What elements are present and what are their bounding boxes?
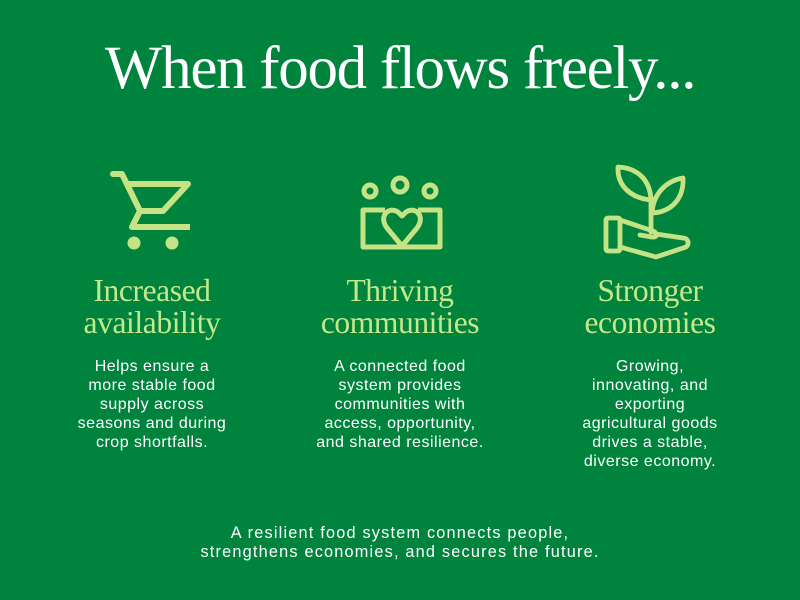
icon: plant in hand xyxy=(604,164,691,260)
text block: drives a stable, xyxy=(592,434,708,451)
heading: availability xyxy=(84,305,220,340)
text block: access, opportunity, xyxy=(324,415,476,432)
heading xyxy=(321,273,479,340)
panel: increased availability xyxy=(78,171,226,451)
text block: Helps ensure a xyxy=(95,358,209,375)
heading xyxy=(84,273,221,340)
icon: shopping cart xyxy=(110,171,191,250)
text block: innovating, and xyxy=(592,377,708,394)
text block: agricultural goods xyxy=(582,415,718,432)
text block: crop shortfalls. xyxy=(96,434,208,451)
text block: communities with xyxy=(335,396,465,413)
text block: exporting xyxy=(615,396,685,413)
panel: thriving communities xyxy=(316,176,484,451)
title: When food flows freely... xyxy=(105,35,695,102)
text block xyxy=(316,358,484,451)
text block: system provides xyxy=(338,377,462,394)
text block: more stable food xyxy=(88,377,216,394)
heading: Stronger xyxy=(597,273,703,308)
panel: stronger economies xyxy=(582,164,718,470)
text block xyxy=(582,358,718,470)
heading: Thriving xyxy=(346,273,454,308)
text block: Growing, xyxy=(616,358,684,375)
icon: community heart xyxy=(360,176,442,250)
heading: Increased xyxy=(93,273,211,308)
text block: seasons and during xyxy=(78,415,226,432)
heading: communities xyxy=(321,305,479,340)
footer text: strengthens economies, and secures the future. xyxy=(200,543,600,561)
text block: A connected food xyxy=(334,358,466,375)
text block xyxy=(78,358,226,451)
text block: supply across xyxy=(100,396,204,413)
footer text: A resilient food system connects people, xyxy=(231,524,569,542)
heading xyxy=(584,273,716,340)
text block: diverse economy. xyxy=(584,453,716,470)
heading: economies xyxy=(584,305,716,340)
footer text xyxy=(200,524,600,561)
text block: and shared resilience. xyxy=(316,434,484,451)
